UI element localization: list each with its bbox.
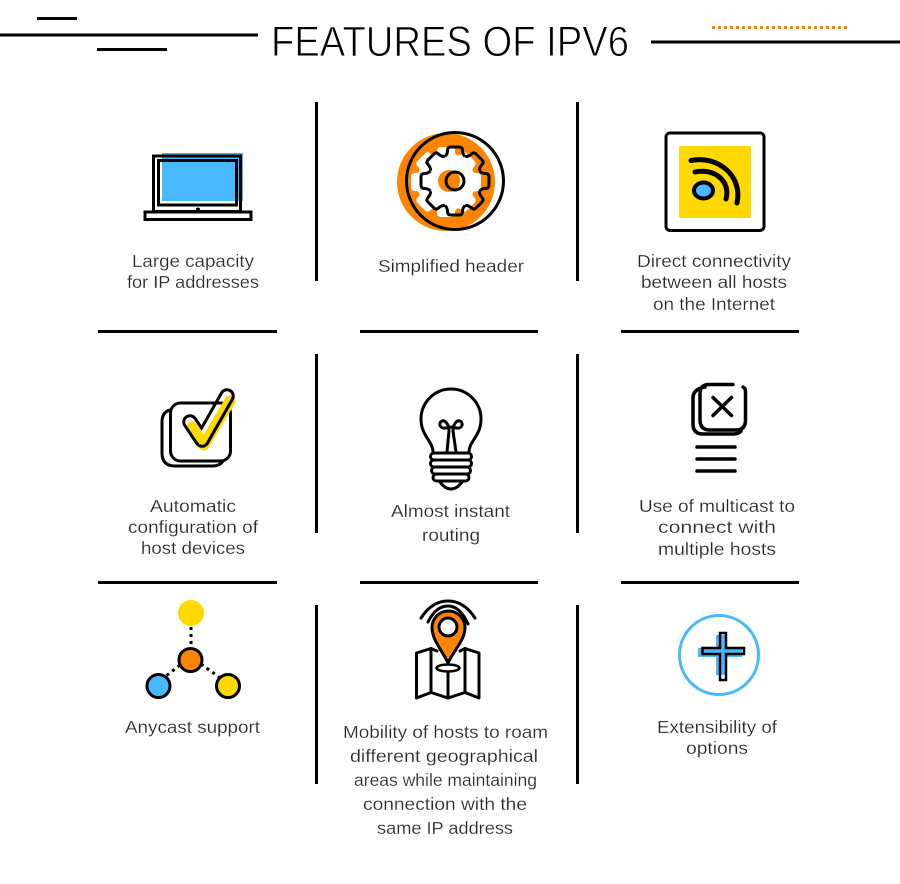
title: FEATURES OF IPV6 [271,18,629,66]
text: direct connectivity: on the Internet [653,294,775,314]
text: extensibility [657,717,777,758]
text: almost instant routing: routing [422,525,480,545]
text: mobility: same IP address [377,818,513,838]
text: large capacity [127,251,259,292]
icon: anycast nodes [147,600,240,698]
text: mobility: connection with the [363,794,527,814]
icon: gear [397,132,504,231]
icon: checkbox [160,388,236,468]
text: simplified header: Simplified header [378,256,524,276]
text: direct connectivity: Direct connectivity [637,251,791,271]
text: almost instant routing: Almost instant [391,501,510,521]
grid dividers [98,102,799,784]
text: anycast support: Anycast support [125,717,260,737]
text: mobility: areas while maintaining [354,770,537,790]
icon: multicast list [693,384,746,471]
text: almost instant routing [391,501,510,545]
text: large capacity: for IP addresses [127,272,259,292]
text: multicast [639,496,795,559]
text: mobility: different geographical [350,746,538,766]
icon: plus in circle [680,616,758,694]
text: automatic configuration: configuration of [128,517,258,537]
header decoration lines [0,18,900,50]
text: mobility: Mobility of hosts to roam [343,722,548,742]
text: automatic configuration: Automatic [150,496,236,516]
text: multicast: connect with [658,517,776,537]
text: large capacity: Large capacity [132,251,254,271]
text: extensibility: options [686,738,748,758]
text: direct connectivity: between all hosts [641,272,787,292]
icon: light bulb [421,389,481,489]
text: extensibility: Extensibility of [657,717,777,737]
icon: connectivity signal [666,133,764,230]
text: automatic configuration [128,496,258,558]
icon: laptop [145,153,251,220]
icon: map with location pin [416,601,479,698]
text: mobility [343,722,548,838]
text: automatic configuration: host devices [141,538,245,558]
text: multicast: Use of multicast to [639,496,795,516]
text: direct connectivity [637,251,791,314]
text: multicast: multiple hosts [658,539,776,559]
